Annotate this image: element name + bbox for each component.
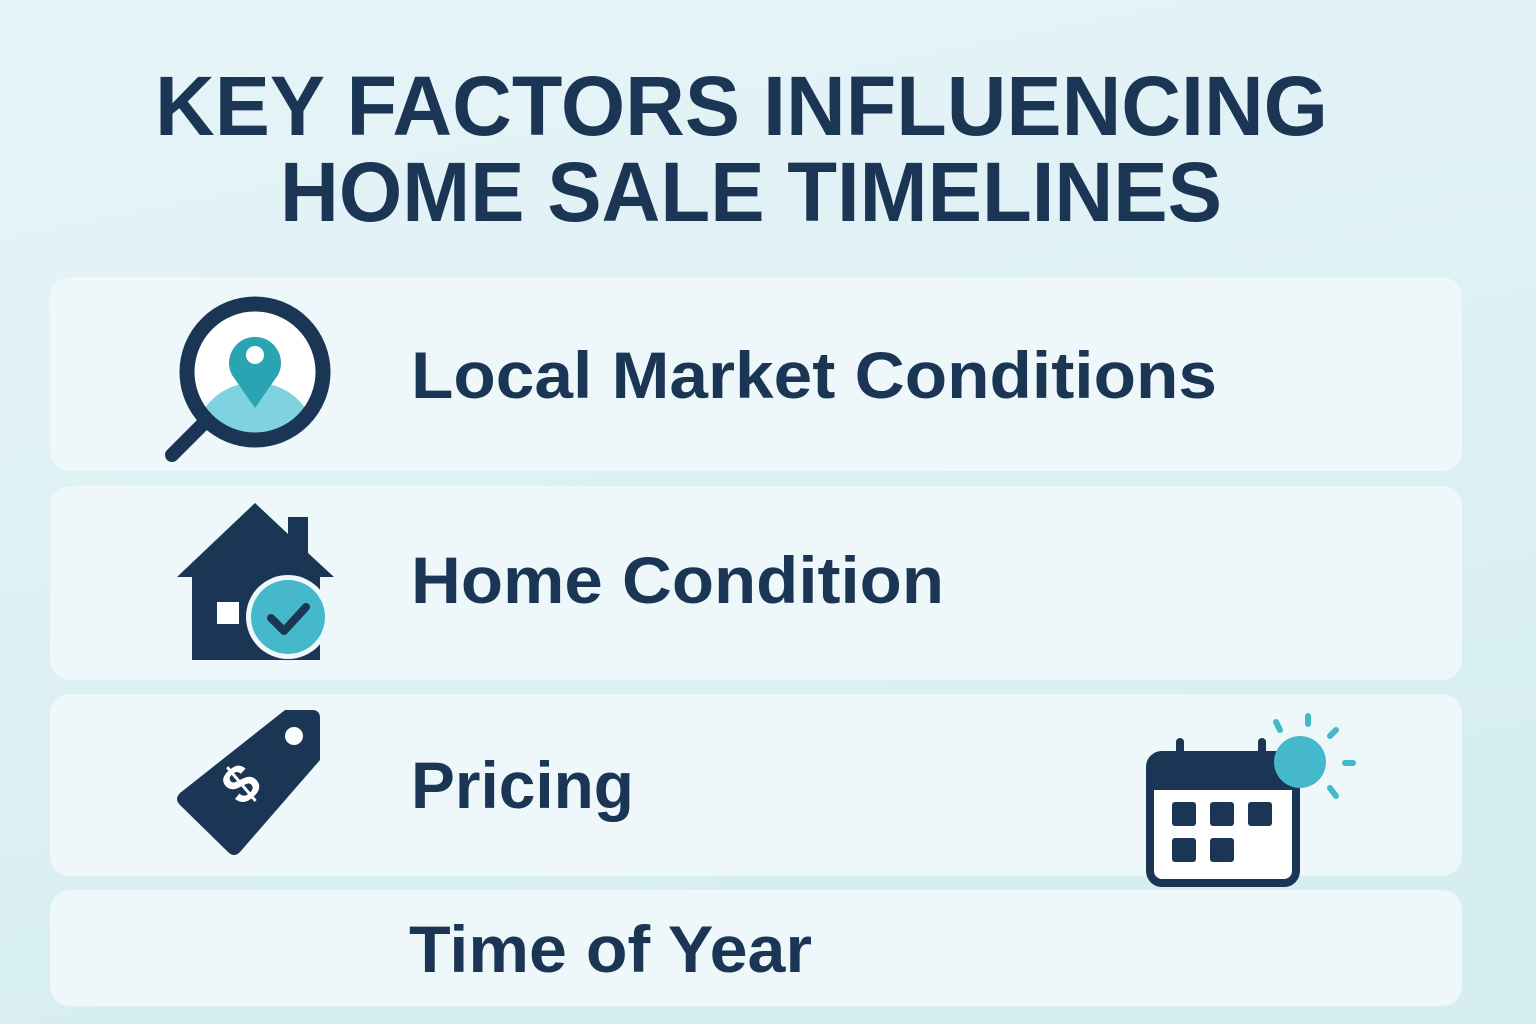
panel: time of year — [50, 890, 1462, 1006]
panel: home condition — [50, 486, 1462, 680]
title: HOME SALE TIMELINES — [280, 145, 1222, 239]
icon: price tag: $ — [211, 752, 272, 817]
label: time of year: Time of Year — [409, 912, 812, 986]
icon: house with check — [177, 503, 334, 660]
label: local market conditions: Local Market Conditions — [411, 338, 1217, 412]
title — [155, 59, 1328, 239]
panel: local market conditions — [50, 277, 1462, 471]
label: home condition: Home Condition — [411, 543, 944, 617]
label: pricing: Pricing — [411, 748, 634, 822]
panel: pricing — [50, 694, 1462, 876]
title: KEY FACTORS INFLUENCING — [155, 59, 1328, 153]
icon: price tag — [177, 710, 320, 855]
icon: magnifier with location pin — [172, 304, 323, 455]
icon: calendar with sun — [1150, 716, 1353, 883]
